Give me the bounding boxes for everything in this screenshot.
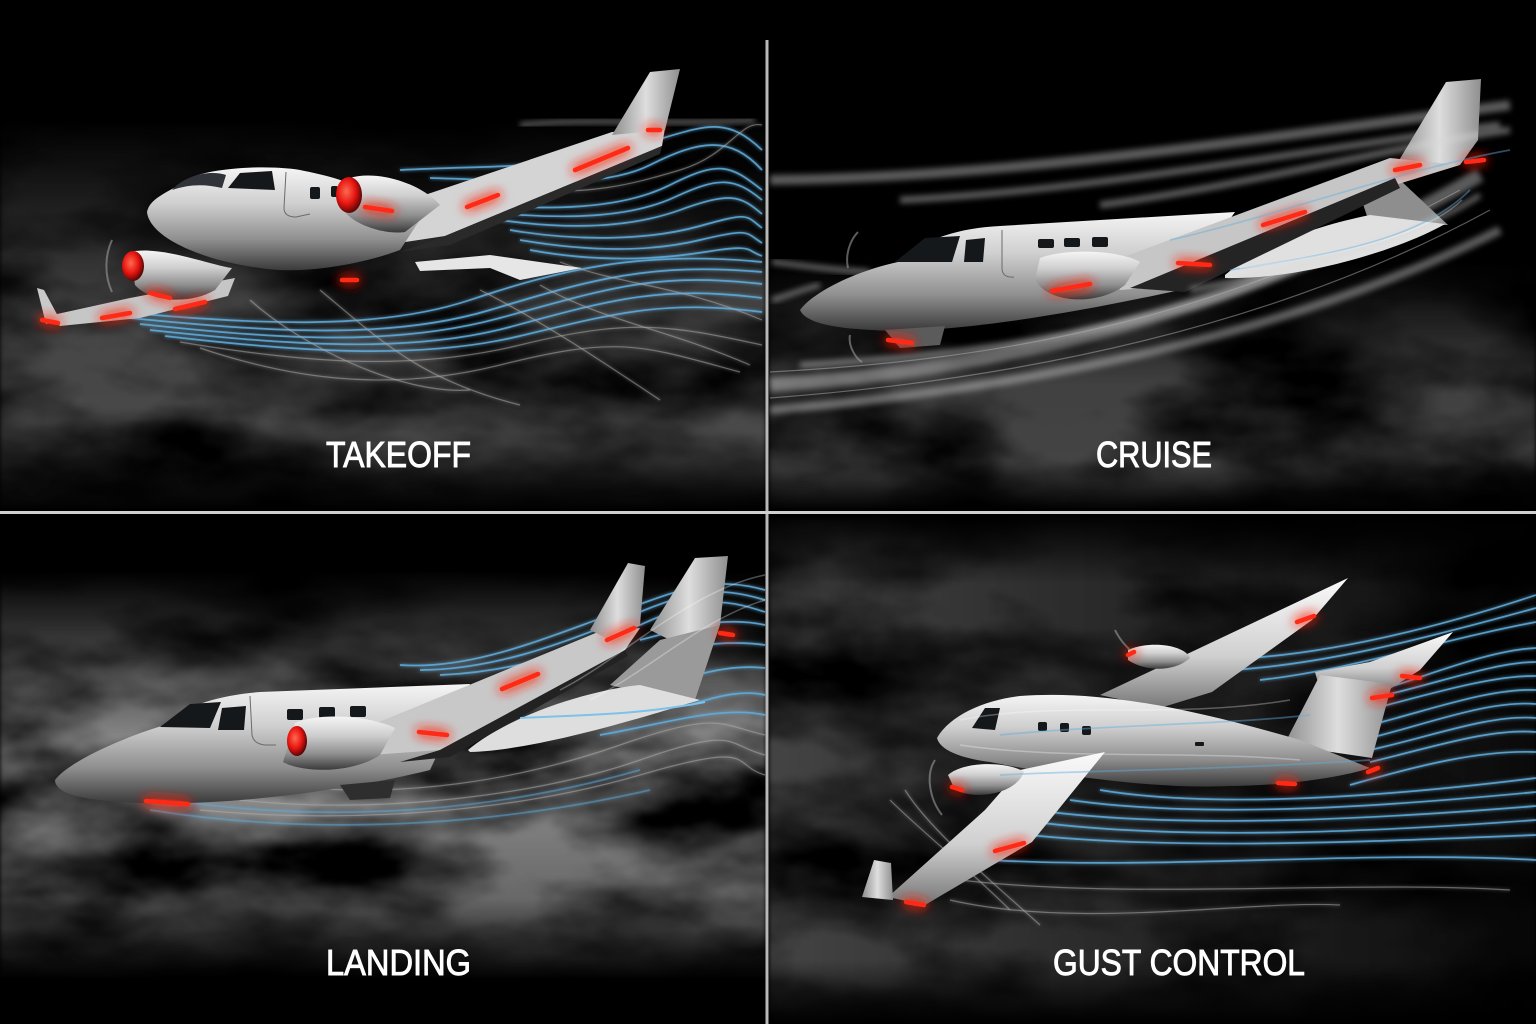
gust airflow streamlines — [890, 595, 1536, 925]
cockpit — [972, 708, 1000, 730]
cruise clouds — [769, 282, 1536, 504]
door and windows — [284, 172, 310, 217]
red control-surface glows — [888, 160, 1484, 343]
near wing — [48, 278, 235, 326]
propeller blur — [847, 232, 862, 362]
far wing and winglet — [405, 130, 665, 242]
door and windows — [1002, 230, 1014, 277]
propeller blur — [930, 630, 1130, 815]
label: landing: LANDING — [326, 942, 471, 983]
gust streamlines over plane — [960, 700, 1370, 775]
takeoff plane — [37, 69, 680, 326]
label: gust control: GUST CONTROL — [1053, 942, 1305, 983]
cruise streamlines over plane — [1100, 130, 1510, 290]
door and windows — [250, 696, 276, 745]
panel: landing — [0, 556, 766, 983]
label: takeoff: TAKEOFF — [326, 434, 471, 475]
near engine — [948, 764, 1024, 795]
tailplane and fin — [1315, 632, 1453, 692]
landing clouds — [0, 570, 766, 980]
vertical divider — [766, 40, 768, 1024]
ventral pod — [340, 780, 395, 800]
propeller blur — [106, 240, 112, 292]
gust control clouds — [769, 514, 1536, 1024]
fuselage — [937, 695, 1370, 787]
aft fuselage — [468, 685, 700, 752]
near engine — [336, 176, 440, 233]
fuselage — [800, 212, 1235, 331]
panel: takeoff — [0, 69, 766, 511]
far wing — [1100, 578, 1348, 708]
wing and winglet — [370, 628, 640, 755]
windows — [1038, 722, 1204, 746]
wing — [1110, 158, 1460, 290]
engine — [283, 717, 395, 770]
cruise wide air streaks — [770, 105, 1510, 410]
takeoff white air streak — [520, 120, 755, 125]
fuselage — [147, 167, 425, 270]
ventral pod — [885, 326, 945, 348]
gust control bottom fade — [769, 960, 1536, 1024]
panel: gust control — [769, 514, 1536, 1024]
horizontal divider — [0, 511, 1536, 514]
landing airflow streamlines — [150, 584, 765, 825]
fuselage — [55, 684, 470, 803]
near wing — [888, 752, 1105, 905]
far engine — [122, 251, 232, 300]
cockpit — [160, 702, 221, 728]
cockpit — [895, 236, 960, 262]
cruise plane — [800, 79, 1484, 362]
far engine — [1128, 645, 1190, 669]
takeoff airflow streamlines — [120, 125, 762, 405]
aft fuselage and tail fin — [1398, 79, 1481, 165]
red control-surface glows — [906, 616, 1420, 905]
panel: cruise — [769, 79, 1536, 511]
landing streamlines over tail — [560, 575, 765, 700]
gust control top fade — [769, 514, 1536, 584]
rear tailplane — [415, 255, 582, 280]
label: cruise: CRUISE — [1096, 434, 1212, 475]
cockpit — [228, 171, 275, 190]
engine — [1035, 252, 1140, 299]
takeoff clouds — [0, 146, 766, 497]
red control-surface glows — [42, 130, 660, 323]
rear tail fin — [650, 556, 728, 640]
gust control plane — [862, 578, 1453, 905]
red control-surface glows — [146, 628, 733, 804]
landing plane — [55, 556, 733, 804]
